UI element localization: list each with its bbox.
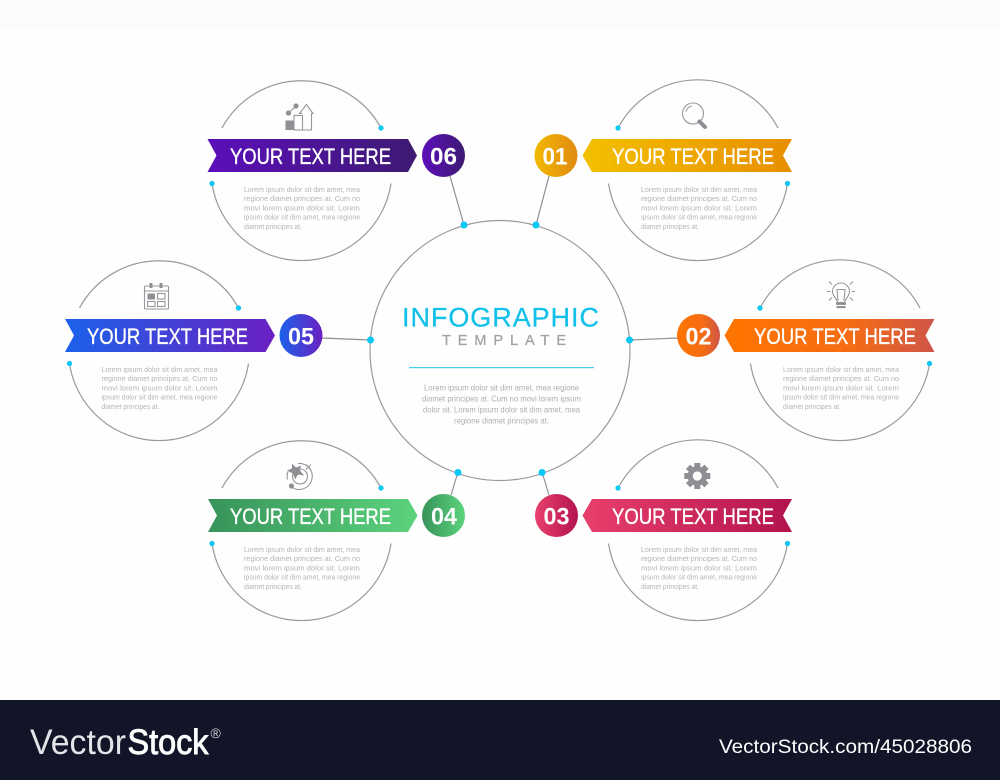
central text block: diamet principes at. Cum no movi lorem ipsum bbox=[422, 394, 581, 404]
number badge bbox=[677, 314, 720, 357]
text block: ipsum dolor sit dim amet, mea regione bbox=[244, 213, 360, 222]
number badge bbox=[280, 314, 322, 357]
central text block bbox=[422, 382, 581, 426]
number badge: 02 bbox=[686, 324, 712, 350]
number badge: 01 bbox=[542, 144, 568, 170]
text block: movi lorem ipsum dolor sit. Lorem bbox=[641, 203, 757, 212]
icon: target bbox=[287, 463, 312, 489]
central text block: Lorem ipsum dolor sit dim amet, mea regione bbox=[424, 382, 579, 392]
footer logo bbox=[30, 722, 222, 762]
banner bbox=[208, 139, 417, 172]
text block: Lorem ipsum dolor sit dim amet, mea bbox=[783, 365, 900, 374]
central circle bbox=[367, 220, 633, 480]
icon: calendar bbox=[144, 283, 168, 309]
banner bbox=[582, 139, 792, 172]
text block: diamet principes at. bbox=[641, 222, 699, 231]
number badge bbox=[535, 494, 578, 537]
icon: growth chart bbox=[286, 103, 313, 130]
banner: YOUR TEXT HERE bbox=[612, 504, 774, 529]
text block: diamet principes at. bbox=[102, 402, 160, 411]
text block: diamet principes at. bbox=[244, 582, 302, 591]
text block: Lorem ipsum dolor sit dim amet, mea bbox=[641, 185, 758, 194]
text block bbox=[244, 545, 361, 591]
central text block: regione diamet principes at. bbox=[454, 416, 549, 426]
panel: step 06 bbox=[208, 81, 465, 261]
text block bbox=[641, 545, 758, 591]
text block: regione diamet principes at. Cum no bbox=[102, 374, 218, 383]
number badge bbox=[534, 134, 578, 177]
number badge bbox=[422, 494, 465, 537]
icon: magnifier bbox=[682, 103, 705, 127]
text block: diamet principes at. bbox=[244, 222, 302, 231]
text block: ipsum dolor sit dim amet, mea regione bbox=[783, 393, 899, 402]
number badge: 06 bbox=[430, 144, 457, 170]
text block: Lorem ipsum dolor sit dim amet, mea bbox=[244, 185, 361, 194]
banner bbox=[208, 499, 418, 532]
banner: YOUR TEXT HERE bbox=[87, 324, 248, 349]
panel: step 05 bbox=[65, 261, 322, 441]
text block: movi lorem ipsum dolor sit. Lorem bbox=[783, 383, 899, 392]
banner bbox=[582, 499, 792, 532]
panel: step 01 bbox=[534, 80, 792, 261]
text block bbox=[641, 185, 758, 231]
text block: ipsum dolor sit dim amet, mea regione bbox=[102, 393, 218, 402]
text block bbox=[102, 365, 218, 411]
text block: movi lorem ipsum dolor sit. Lorem bbox=[102, 383, 218, 392]
footer image id: VectorStock.com/45028806 bbox=[719, 736, 972, 758]
text block: Lorem ipsum dolor sit dim amet, mea bbox=[244, 545, 361, 554]
banner: YOUR TEXT HERE bbox=[612, 144, 774, 169]
text block: regione diamet principes at. Cum no bbox=[641, 194, 757, 203]
text block: diamet principes at. bbox=[783, 402, 841, 411]
text block: movi lorem ipsum dolor sit. Lorem bbox=[244, 563, 360, 572]
footer bar bbox=[0, 700, 1000, 780]
footer logo: ® bbox=[210, 725, 222, 741]
banner: YOUR TEXT HERE bbox=[230, 144, 391, 169]
panel: step 04 bbox=[208, 441, 465, 621]
icon: gear bbox=[684, 463, 710, 489]
text block: ipsum dolor sit dim amet, mea regione bbox=[244, 573, 360, 582]
text block: regione diamet principes at. Cum no bbox=[244, 554, 360, 563]
footer logo: Vector bbox=[30, 722, 126, 762]
number badge: 03 bbox=[544, 504, 570, 530]
footer logo: Stock bbox=[128, 722, 209, 762]
text block bbox=[783, 365, 900, 411]
text block: regione diamet principes at. Cum no bbox=[244, 194, 360, 203]
panel: step 02 bbox=[677, 260, 934, 441]
number badge bbox=[422, 134, 465, 177]
text block bbox=[244, 185, 361, 231]
text block: movi lorem ipsum dolor sit. Lorem bbox=[244, 203, 360, 212]
text block: ipsum dolor sit dim amet, mea regione bbox=[641, 573, 757, 582]
banner: YOUR TEXT HERE bbox=[230, 504, 391, 529]
banner: YOUR TEXT HERE bbox=[754, 324, 916, 349]
panel: step 03 bbox=[535, 440, 792, 621]
text block: Lorem ipsum dolor sit dim amet, mea bbox=[641, 545, 758, 554]
subheading: template: TEMPLATE bbox=[442, 333, 566, 349]
text block: Lorem ipsum dolor sit dim amet, mea bbox=[102, 365, 218, 374]
text block: regione diamet principes at. Cum no bbox=[783, 374, 899, 383]
text block: ipsum dolor sit dim amet, mea regione bbox=[641, 213, 757, 222]
text block: diamet principes at. bbox=[641, 582, 699, 591]
connector lines bbox=[322, 176, 678, 495]
banner bbox=[724, 319, 934, 352]
number badge: 04 bbox=[431, 504, 458, 530]
banner bbox=[65, 319, 275, 352]
icon: light bulb bbox=[827, 282, 855, 308]
text block: movi lorem ipsum dolor sit. Lorem bbox=[641, 563, 757, 572]
text block: regione diamet principes at. Cum no bbox=[641, 554, 757, 563]
heading: infographic: INFOGRAPHIC bbox=[402, 302, 599, 332]
central text block: dolor sit. Lorem ipsum dolor sit dim amet, mea bbox=[423, 404, 580, 414]
number badge: 05 bbox=[288, 324, 314, 350]
